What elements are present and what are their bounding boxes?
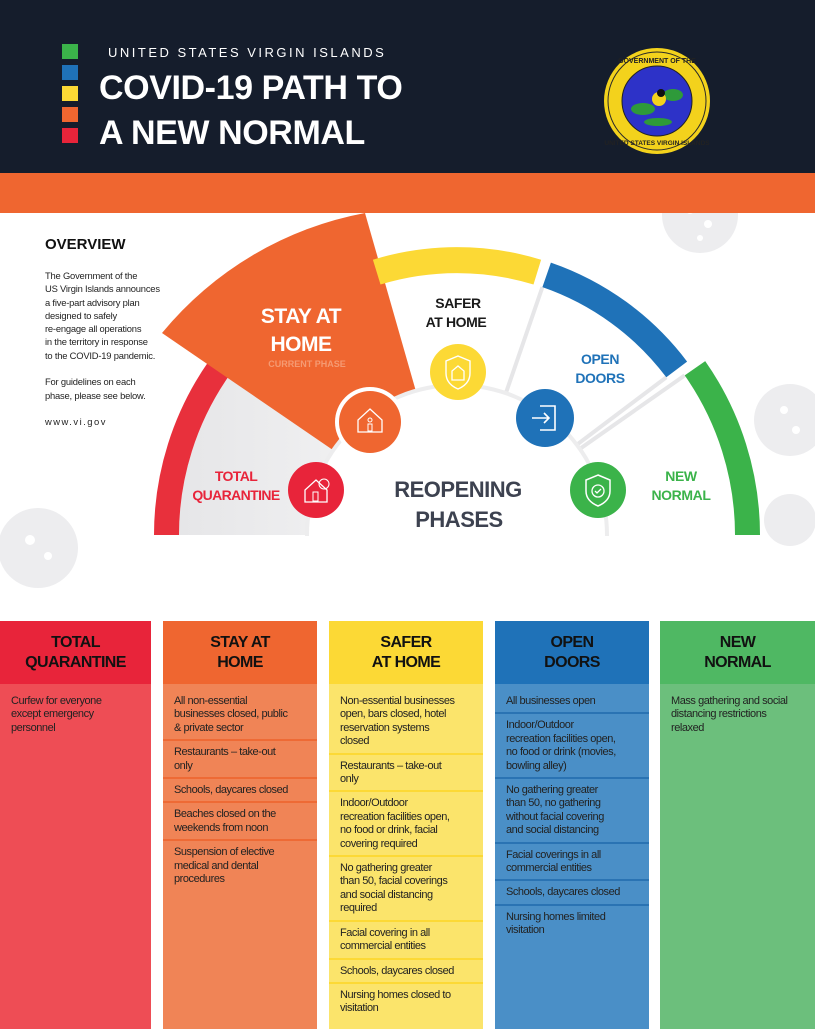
column: stay at home: Schools, daycares closed <box>174 784 288 796</box>
column: open doors: Nursing homes limited <box>506 911 605 923</box>
yellow band <box>373 247 541 284</box>
gauge <box>0 213 815 588</box>
gauge: NORMAL <box>651 487 711 503</box>
column: open doors: recreation facilities open, <box>506 733 616 745</box>
new normal label: NEW <box>665 468 698 484</box>
column: total quarantine: TOTAL <box>51 634 100 650</box>
column: safer at home: SAFER <box>380 634 432 650</box>
overview: designed to safely <box>45 310 117 321</box>
safer at home label: SAFER <box>435 295 481 311</box>
overview: in the territory in response <box>45 336 148 347</box>
open doors label: OPEN <box>581 351 619 367</box>
column: safer at home: covering required <box>340 838 417 850</box>
reopening phases title: REOPENING <box>394 477 522 502</box>
column: safer at home: Schools, daycares closed <box>340 964 454 976</box>
column: safer at home: Non-essential businesses <box>340 695 455 707</box>
column: new normal: NEW <box>720 634 755 650</box>
column: new normal: distancing restrictions <box>671 708 766 720</box>
overview: The Government of the <box>45 270 137 281</box>
seal <box>604 48 710 154</box>
column: open doors: bowling alley) <box>506 760 566 772</box>
column: safer at home: Nursing homes closed to <box>340 989 451 1001</box>
virus decorations <box>0 177 815 588</box>
icon: new normal <box>570 462 626 518</box>
icon: stay at home <box>335 387 405 457</box>
column: new normal: NORMAL <box>704 654 771 670</box>
column: new normal: relaxed <box>671 722 704 734</box>
column: stay at home: weekends from noon <box>174 822 268 834</box>
column: new normal <box>660 621 815 1029</box>
column: stay at home: Suspension of elective <box>174 846 274 858</box>
column: open doors: commercial entities <box>506 862 592 874</box>
red wedge interior <box>179 378 332 535</box>
orange sector <box>162 213 416 449</box>
overview: to the COVID-19 pandemic. <box>45 350 155 361</box>
gauge: AT HOME <box>426 314 486 330</box>
orange band <box>0 173 815 213</box>
column: safer at home: Restaurants – take-out <box>340 760 441 772</box>
column: stay at home: only <box>174 760 192 772</box>
white wedges shadow lines <box>504 286 686 450</box>
column: safer at home: only <box>340 773 358 785</box>
overview: For guidelines on each <box>45 376 135 387</box>
column: safer at home: visitation <box>340 1002 378 1014</box>
column: safer at home: and social distancing <box>340 889 433 901</box>
column: stay at home: Beaches closed on the <box>174 808 276 820</box>
gauge: HOME <box>270 333 332 356</box>
column: safer at home: commercial entities <box>340 940 426 952</box>
column: open doors: No gathering greater <box>506 784 598 796</box>
column: open doors: and social distancing <box>506 824 599 836</box>
gauge: QUARANTINE <box>192 487 280 503</box>
column: open doors <box>495 621 649 1029</box>
column: safer at home: recreation facilities open, <box>340 811 450 823</box>
icon: total quarantine <box>288 462 344 518</box>
icon: open doors <box>516 389 574 447</box>
column: open doors: no food or drink (movies, <box>506 746 616 758</box>
column: safer at home: than 50, facial coverings <box>340 875 447 887</box>
column: safer at home: required <box>340 902 377 914</box>
column: open doors: visitation <box>506 924 544 936</box>
column: stay at home: All non-essential <box>174 695 247 707</box>
column: new normal: Mass gathering and social <box>671 695 788 707</box>
column: safer at home: Indoor/Outdoor <box>340 797 408 809</box>
stay at home label: STAY AT <box>261 305 342 328</box>
column: stay at home: HOME <box>217 654 263 670</box>
icon: safer at home <box>430 344 486 400</box>
column: stay at home: & private sector <box>174 722 243 734</box>
blue band <box>542 263 687 377</box>
header band <box>0 0 815 173</box>
column: safer at home: no food or drink, facial <box>340 824 437 836</box>
column: open doors: Facial coverings in all <box>506 849 601 861</box>
column: open doors: OPEN <box>551 634 593 650</box>
total quarantine label: TOTAL <box>215 468 258 484</box>
column: open doors: Indoor/Outdoor <box>506 719 574 731</box>
seal: UNITED STATES VIRGIN ISLANDS <box>604 140 710 147</box>
column: open doors: DOORS <box>544 654 600 670</box>
overview: a five-part advisory plan <box>45 297 140 308</box>
hub <box>305 385 609 536</box>
column: total quarantine: Curfew for everyone <box>11 695 102 707</box>
column: total quarantine: except emergency <box>11 708 94 720</box>
column: open doors: than 50, no gathering <box>506 797 601 809</box>
gauge: PHASES <box>415 507 503 532</box>
column: safer at home: reservation systems <box>340 722 429 734</box>
gauge: DOORS <box>575 370 625 386</box>
column: stay at home: medical and dental <box>174 860 258 872</box>
overview: www.vi.gov <box>45 416 107 427</box>
column: total quarantine: QUARANTINE <box>25 654 126 670</box>
column: safer at home: No gathering greater <box>340 862 432 874</box>
column: stay at home: STAY AT <box>210 634 270 650</box>
overview: US Virgin Islands announces <box>45 283 160 294</box>
column: open doors: Schools, daycares closed <box>506 886 620 898</box>
green band <box>685 361 760 535</box>
color squares <box>62 44 78 143</box>
column: safer at home: open, bars closed, hotel <box>340 708 446 720</box>
title <box>99 69 402 152</box>
column: total quarantine: personnel <box>11 722 55 734</box>
overview <box>45 236 160 427</box>
red band <box>154 361 229 535</box>
column: open doors: without facial covering <box>506 811 604 823</box>
column: safer at home <box>329 621 483 1029</box>
subtitle: UNITED STATES VIRGIN ISLANDS <box>108 45 386 60</box>
title: A NEW NORMAL <box>99 114 365 152</box>
column: stay at home: businesses closed, public <box>174 708 288 720</box>
column: stay at home <box>163 621 317 1029</box>
overview: phase, please see below. <box>45 390 146 401</box>
overview: OVERVIEW <box>45 236 126 253</box>
title: COVID-19 PATH TO <box>99 69 402 107</box>
column: stay at home: Restaurants – take-out <box>174 746 275 758</box>
column: safer at home: Facial covering in all <box>340 927 430 939</box>
column: safer at home: closed <box>340 735 369 747</box>
overview: re-engage all operations <box>45 323 141 334</box>
column: safer at home: AT HOME <box>372 654 440 670</box>
column: open doors: All businesses open <box>506 695 595 707</box>
seal: GOVERNMENT OF THE <box>618 58 696 65</box>
column: total quarantine <box>0 621 151 1029</box>
gauge: CURRENT PHASE <box>268 359 346 369</box>
column: stay at home: procedures <box>174 873 225 885</box>
